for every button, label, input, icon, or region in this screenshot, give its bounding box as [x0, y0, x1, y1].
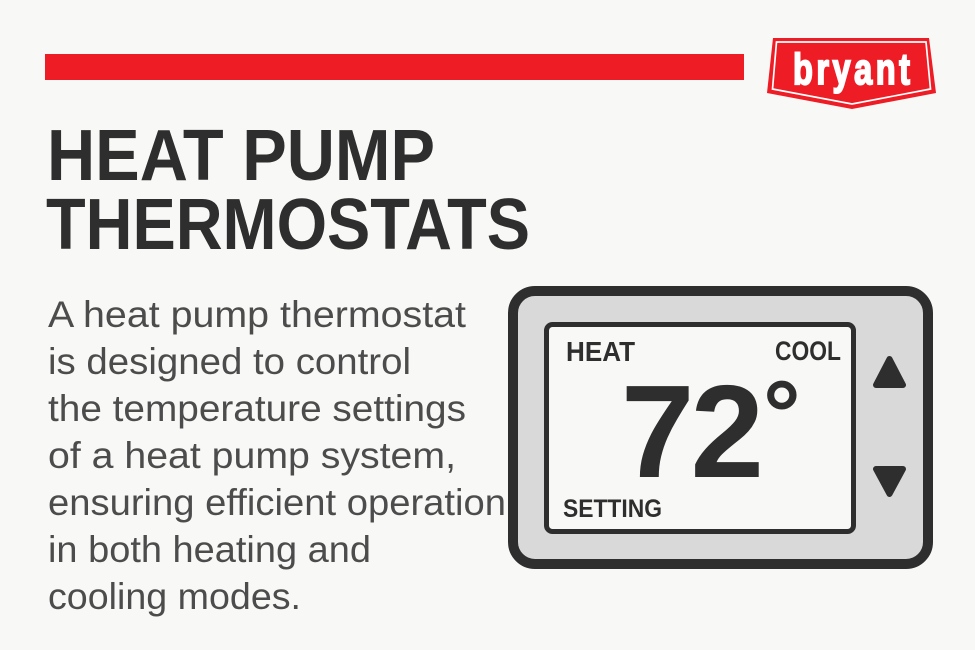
temperature reading: °	[763, 361, 801, 466]
description text block	[48, 294, 506, 617]
title: HEAT PUMP	[47, 116, 435, 196]
description text block: A heat pump thermostat	[48, 294, 467, 335]
icon: down arrow button	[876, 469, 903, 494]
description text block: of a heat pump system,	[48, 435, 456, 476]
description text block: cooling modes.	[48, 576, 301, 617]
cool mode label: COOL	[775, 336, 841, 366]
red header bar	[45, 54, 744, 80]
description text block: ensuring efficient operation	[48, 482, 506, 523]
thermostat screen	[546, 324, 854, 532]
logo: bryant badge: bryant	[793, 45, 910, 94]
setting label: SETTING	[563, 495, 662, 523]
thermostat casing	[513, 291, 928, 564]
title: THERMOSTATS	[46, 185, 530, 265]
thermostat device	[513, 291, 928, 564]
title	[46, 116, 530, 265]
description text block: the temperature settings	[48, 388, 466, 429]
logo: bryant badge	[767, 38, 936, 109]
description text block: in both heating and	[48, 529, 371, 570]
temperature reading: 72	[621, 358, 764, 505]
heat mode label: HEAT	[566, 336, 635, 367]
description text block: is designed to control	[48, 341, 411, 382]
icon: up arrow button	[876, 359, 903, 385]
